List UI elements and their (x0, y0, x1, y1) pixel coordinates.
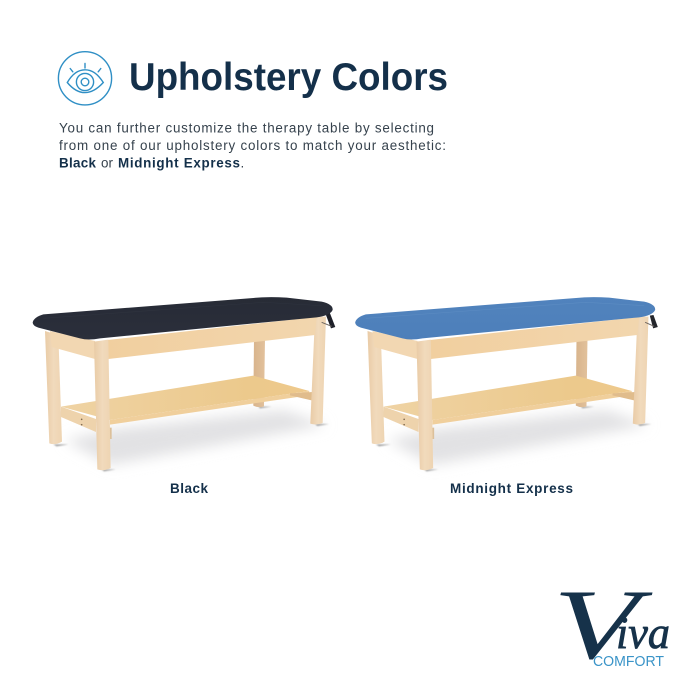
back leg (576, 340, 587, 407)
front leg (416, 340, 433, 470)
intro text: Black (59, 156, 97, 170)
table: midnight express upholstery (355, 297, 658, 471)
table: black upholstery (33, 297, 335, 471)
intro text: . (240, 156, 244, 170)
intro text (59, 120, 446, 170)
intro text: or (101, 156, 114, 170)
title: Upholstery Colors (129, 56, 448, 99)
front leg (94, 340, 111, 470)
floor shadow (387, 410, 649, 465)
label: black: Black (170, 481, 208, 496)
logo: Viva Comfort: COMFORT (593, 653, 664, 670)
shelf (61, 376, 309, 420)
rear-left leg (367, 331, 384, 444)
intro text: You can further customize the therapy table by selecting (59, 120, 434, 136)
intro text: Midnight Express (118, 156, 240, 170)
strap (650, 315, 658, 328)
intro text: from one of our upholstery colors to match your aesthetic: (59, 138, 446, 153)
logo: Viva Comfort: V (553, 569, 653, 680)
shelf (383, 376, 632, 420)
back leg (253, 340, 265, 407)
label: midnight express: Midnight Express (450, 481, 573, 496)
strap (326, 312, 335, 328)
logo: Viva Comfort: iva (616, 607, 670, 658)
right leg (633, 317, 648, 425)
icon: eye in circle (58, 52, 112, 105)
rear-left leg (45, 331, 62, 444)
cushion (33, 297, 333, 339)
right leg (310, 317, 326, 425)
floor shadow (65, 410, 327, 465)
cushion (355, 297, 655, 339)
apron (372, 331, 417, 359)
apron (50, 331, 95, 359)
logo: Viva Comfort (553, 569, 670, 680)
